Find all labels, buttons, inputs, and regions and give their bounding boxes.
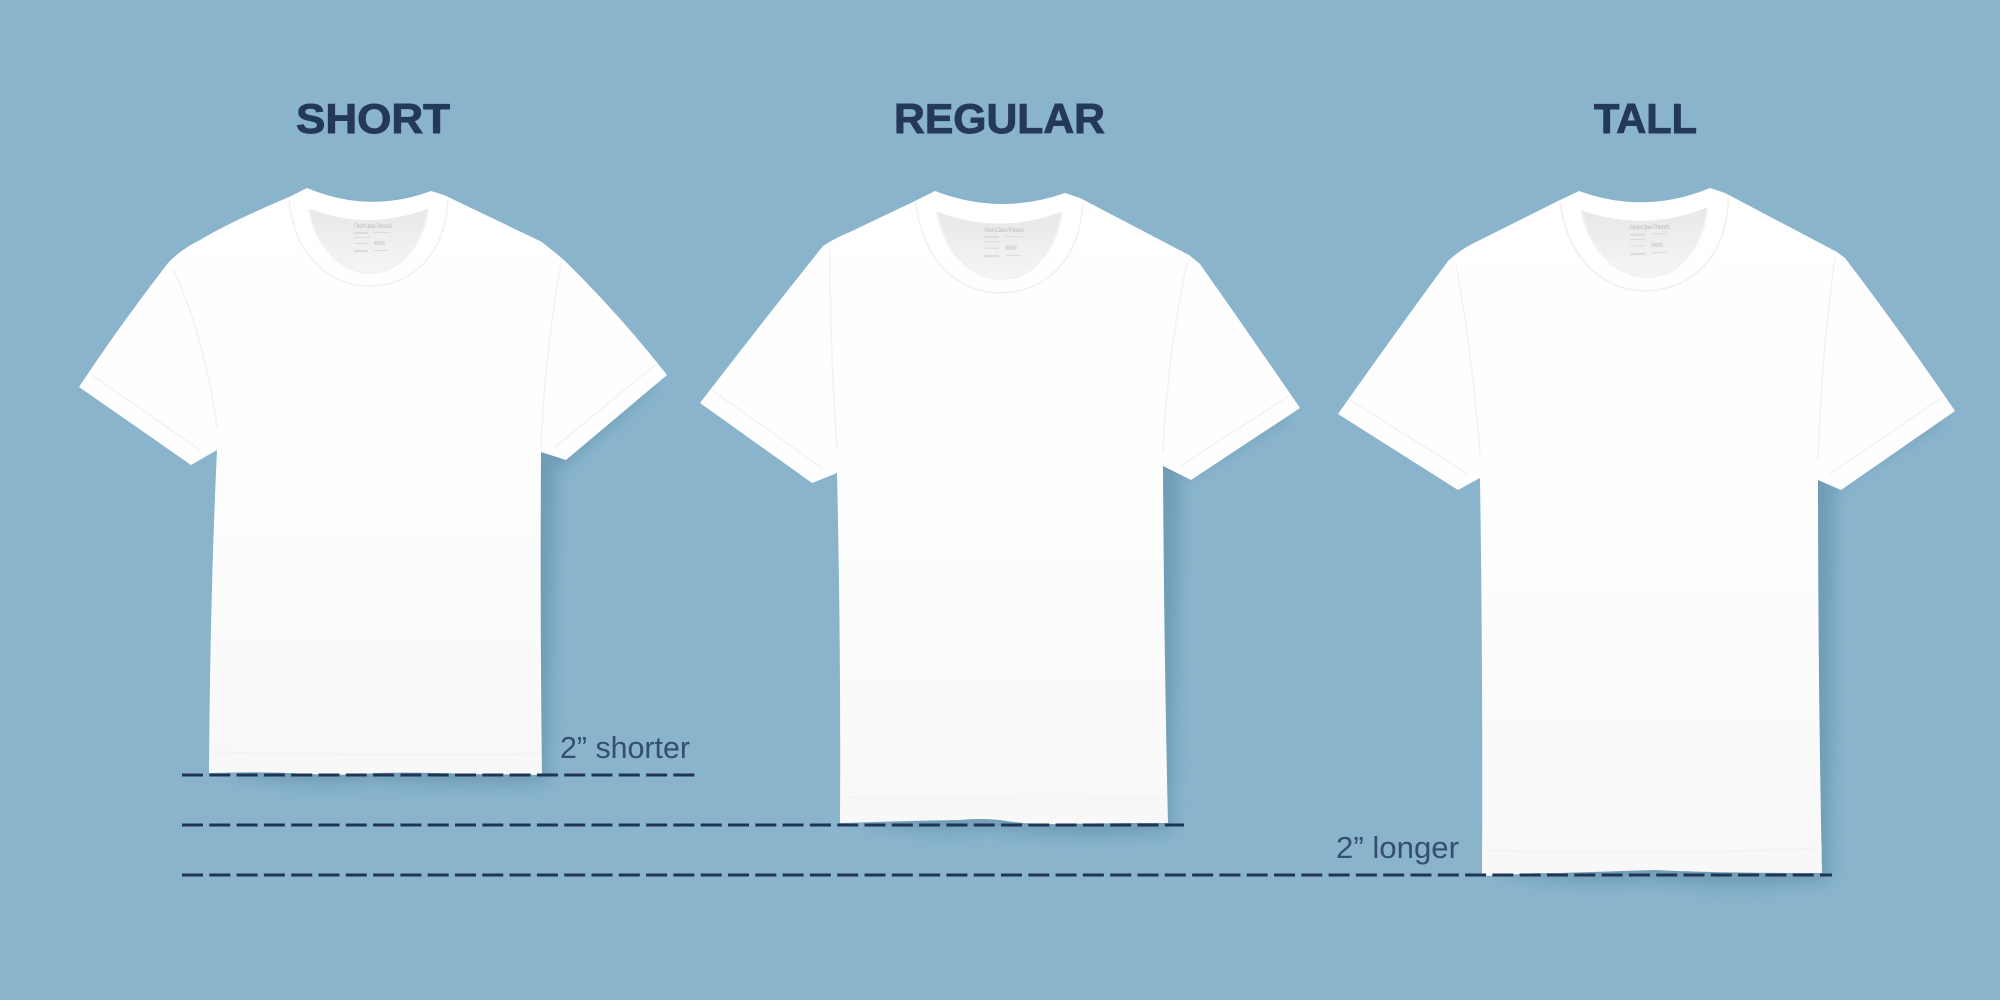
dashed line: short hem level [182, 774, 695, 776]
title: TALL: TALL [1594, 95, 1697, 142]
neck: short [289, 200, 448, 286]
dashed line: tall hem level [182, 874, 1832, 876]
neck label: regular: Fresh Clean Threads [984, 227, 1024, 234]
title: SHORT: SHORT [296, 95, 450, 142]
label: 2 inches shorter: 2” shorter [560, 730, 690, 765]
t-shirt: tall [1338, 188, 1955, 886]
title: REGULAR: REGULAR [894, 95, 1105, 142]
neck: regular [916, 202, 1083, 293]
t-shirt: regular [700, 191, 1300, 836]
neck label: short: Fresh Clean Threads [354, 224, 392, 230]
dashed line: regular hem level [182, 824, 1184, 826]
t-shirt: short [79, 188, 667, 785]
neck: tall [1560, 197, 1731, 293]
neck label: tall: Fresh Clean Threads [1630, 224, 1670, 232]
label: 2 inches longer: 2” longer [1336, 830, 1459, 865]
